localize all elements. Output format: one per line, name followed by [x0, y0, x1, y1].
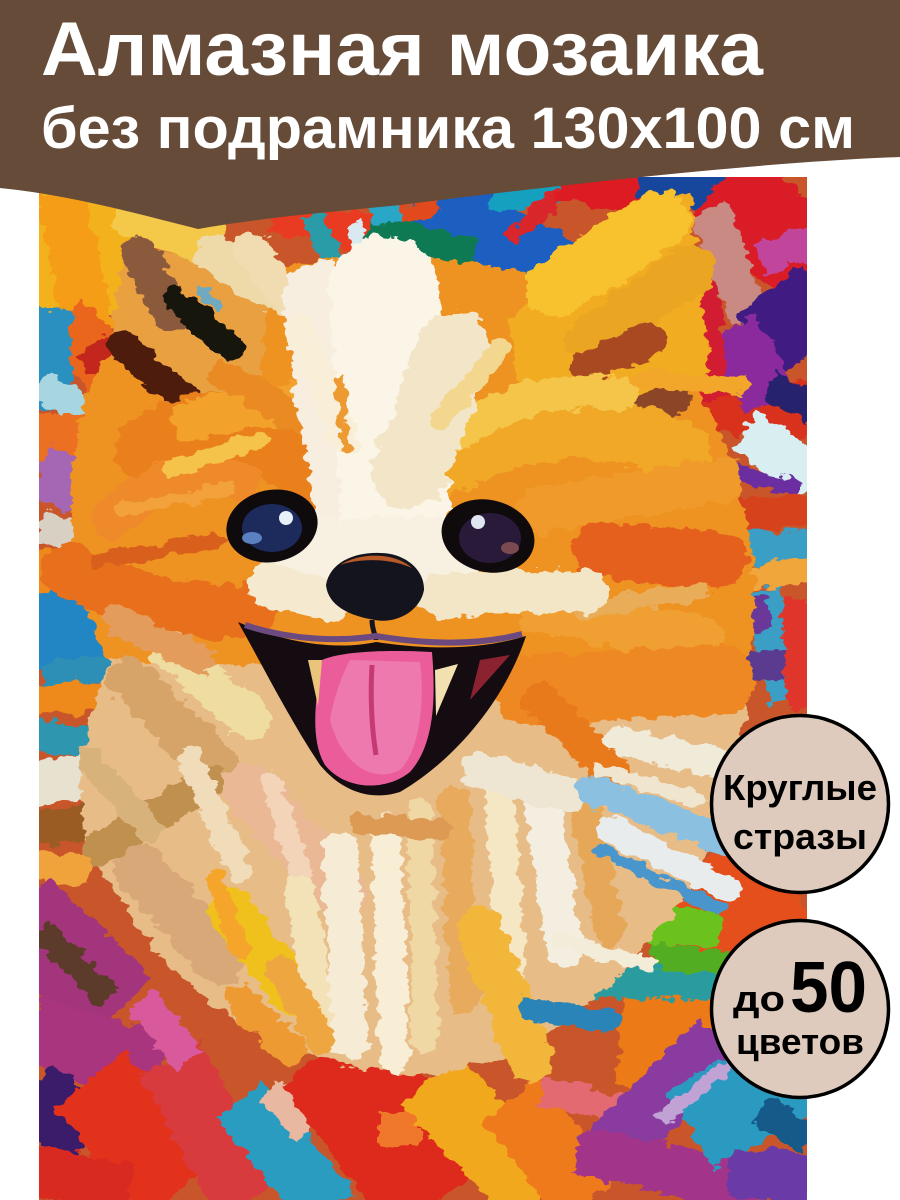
- subtitle: без подрамника 130х100 см: [41, 96, 855, 161]
- top centre: [270, 215, 380, 235]
- right lower: [672, 854, 807, 953]
- badge: up to 50 colours: [712, 920, 888, 1098]
- badge: up to 50 colours: цветов: [736, 1021, 864, 1062]
- bottom centre: [240, 1100, 330, 1200]
- left ear: [110, 240, 269, 394]
- badge: up to 50 colours: до: [733, 978, 785, 1019]
- icon: nose: [326, 553, 424, 640]
- right upper strip: [690, 400, 810, 410]
- bottom right: [620, 1030, 740, 1040]
- left blue: [50, 310, 52, 410]
- white blaze: [320, 300, 350, 500]
- right ear: [508, 193, 712, 396]
- top right: [410, 210, 560, 290]
- header banner: [0, 0, 900, 229]
- bottom left: [20, 910, 120, 1010]
- badge: round rhinestones: стразы: [733, 816, 867, 857]
- icon: right eye: [442, 499, 534, 573]
- badge: round rhinestones: Круглые: [723, 767, 877, 808]
- face side strokes: [150, 429, 320, 480]
- open mouth with tongue: [238, 622, 526, 795]
- painting background strokes: [20, 160, 820, 1200]
- head base: [72, 258, 754, 715]
- title: Алмазная мозаика: [41, 7, 764, 92]
- icon: left eye: [226, 490, 318, 562]
- title: [41, 7, 855, 161]
- top left yellow: [39, 193, 134, 316]
- radiating chest fur: [130, 680, 220, 770]
- painting: pomeranian dog in impasto oil: [20, 160, 820, 1200]
- chest base: [81, 660, 750, 1075]
- badge: up to 50 colours: 50: [790, 948, 867, 1028]
- dog body and fur: [70, 195, 754, 1075]
- badge: round rhinestones: [712, 716, 888, 892]
